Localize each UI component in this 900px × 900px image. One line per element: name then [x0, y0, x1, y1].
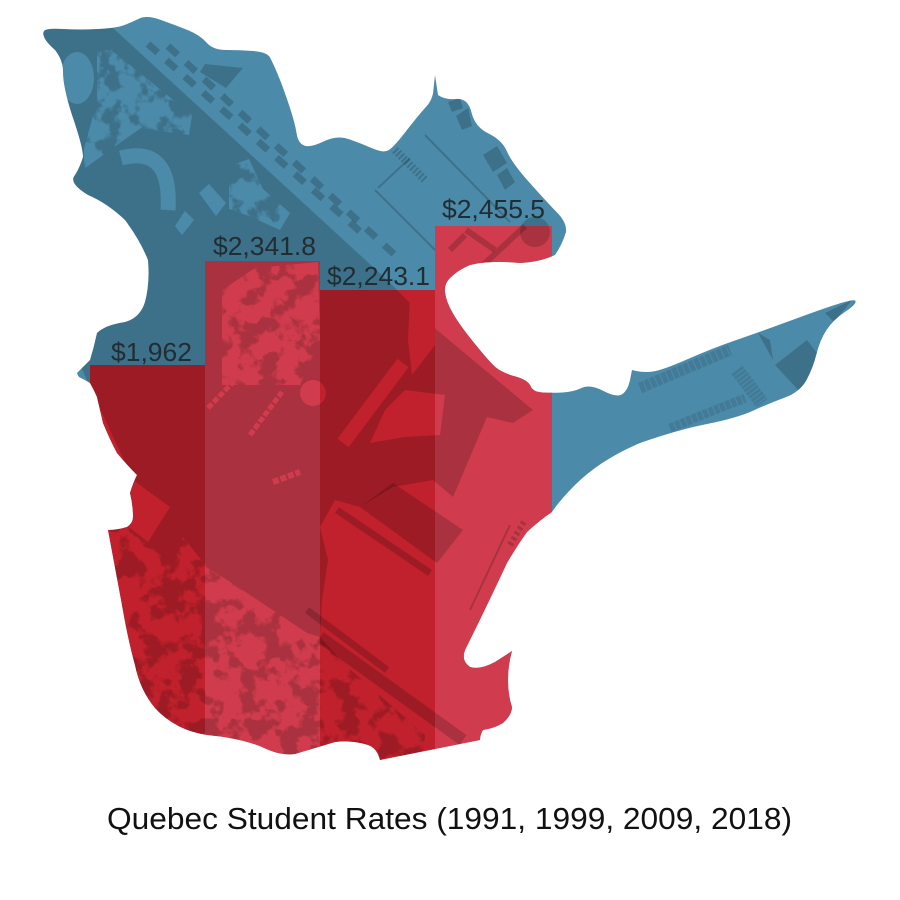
bar 1999: [205, 261, 320, 781]
bar 2018: [435, 226, 552, 756]
value label: 2018: $2,455.5: [442, 194, 545, 224]
photo texture: grainy arm bands: [640, 350, 762, 428]
photo texture: dark tones: [30, 28, 533, 637]
value label: 1991: $1,962: [111, 337, 192, 367]
value label: 1999: $2,341.8: [213, 231, 316, 261]
photo texture: blotches: [84, 50, 425, 760]
photo texture: strokes and dashes: [148, 44, 525, 740]
Quebec map silhouette: [43, 17, 856, 760]
title: Quebec Student Rates (1991, 1999, 2009, 2018): [107, 801, 792, 836]
bar 1991: [90, 365, 205, 735]
value label: 2009: $2,243.1: [327, 261, 430, 291]
bar 2009: [320, 290, 435, 780]
photo texture: details: [200, 64, 852, 563]
